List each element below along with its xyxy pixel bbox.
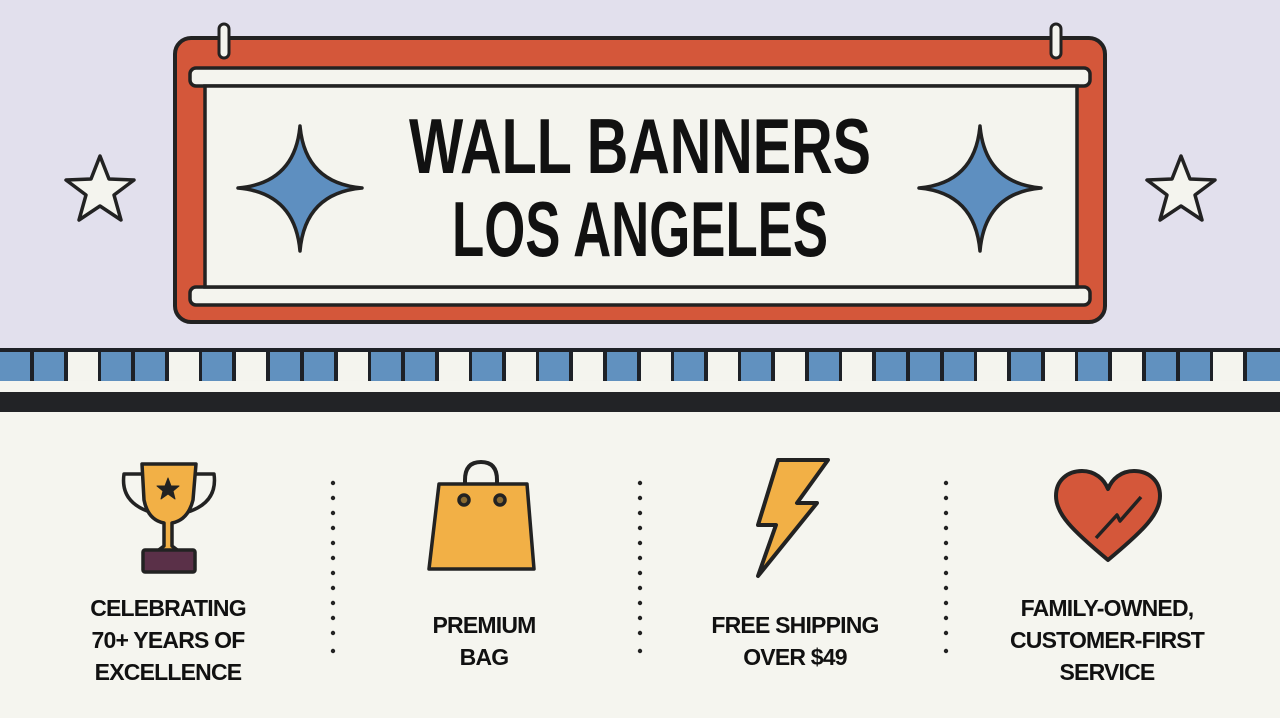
title: WALL BANNERS <box>409 102 871 190</box>
text: col 3 <box>711 612 879 670</box>
text: col 2: BAG <box>460 644 508 670</box>
icon: right sparkle <box>919 126 1041 251</box>
icon: heart <box>1056 471 1160 560</box>
tile strip <box>0 348 1280 412</box>
dividers <box>331 481 948 653</box>
text: col 2 <box>432 612 536 670</box>
text: col 4: SERVICE <box>1060 659 1155 685</box>
text: col 1: 70+ YEARS OF <box>92 627 245 653</box>
icon: left star <box>66 156 134 220</box>
hooks <box>219 24 229 58</box>
icon: bag <box>429 462 534 569</box>
icon: trophy <box>124 464 214 572</box>
text: col 3: FREE SHIPPING <box>711 612 879 638</box>
text: col 4: FAMILY-OWNED, <box>1021 595 1193 621</box>
text: col 3: OVER $49 <box>743 644 847 670</box>
top roller <box>190 68 1090 86</box>
icon: lightning <box>758 460 828 576</box>
icon: right star <box>1147 156 1215 220</box>
banner panel <box>205 86 1077 287</box>
icon: left sparkle <box>238 126 362 251</box>
text: col 1 <box>90 595 246 685</box>
red frame <box>175 38 1105 322</box>
text: col 4 <box>1010 595 1205 685</box>
text: col 1: CELEBRATING <box>90 595 246 621</box>
banner: LOS ANGELES <box>452 185 828 273</box>
banner <box>175 24 1105 322</box>
bottom roller <box>190 287 1090 305</box>
text: col 4: CUSTOMER-FIRST <box>1010 627 1205 653</box>
text: col 2: PREMIUM <box>432 612 536 638</box>
text: col 1: EXCELLENCE <box>95 659 242 685</box>
